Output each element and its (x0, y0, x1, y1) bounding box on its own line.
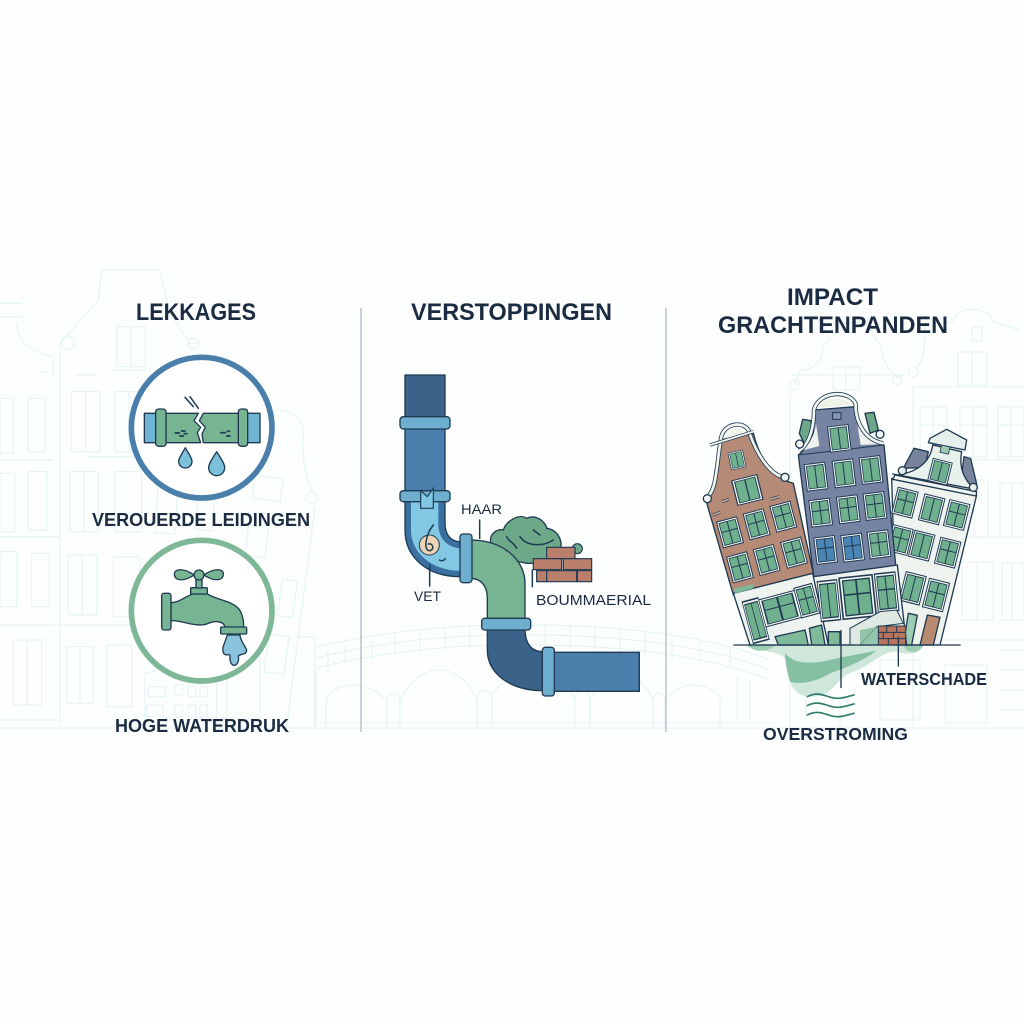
clogged elbow (405, 500, 460, 577)
icon: water waves (807, 694, 854, 717)
illustration: leaning canal houses with flood (703, 394, 977, 717)
label: hoge waterdruk: HOGE WATERDRUK (115, 715, 290, 736)
damaged bricks (878, 626, 906, 645)
heading: impact grachtenpanden: IMPACT (787, 284, 878, 311)
bricks (533, 544, 592, 582)
heading: impact grachtenpanden (718, 284, 948, 339)
blue house (796, 394, 907, 645)
label: waterschade: WATERSCHADE (861, 669, 987, 689)
right house (887, 429, 977, 645)
bush (490, 517, 561, 563)
heading: lekkages: LEKKAGES (136, 299, 256, 326)
column dividers (361, 308, 666, 732)
background: faint bridge (0, 625, 1024, 728)
green elbow (470, 540, 525, 620)
heading: impact grachtenpanden: GRACHTENPANDEN (718, 312, 948, 339)
label: overstroming: OVERSTROMING (763, 724, 908, 744)
icon: dripping tap in green circle (131, 540, 272, 681)
ground line (733, 643, 961, 647)
leader lines (430, 520, 480, 586)
heading: verstoppingen: VERSTOPPINGEN (411, 299, 612, 326)
leader lines (841, 630, 898, 688)
icon: cracked pipe in blue circle (131, 357, 272, 498)
diagram: blocked drain pipe (400, 375, 639, 696)
label: verouerde leidingen: VEROUERDE LEIDINGEN (92, 509, 310, 530)
label: boummaerial: BOUMMAERIAL (536, 592, 651, 609)
background: faint right canal houses (790, 309, 1024, 728)
brown house (703, 425, 830, 645)
lower elbow and outlet (487, 628, 543, 691)
label: haar: HAAR (461, 501, 502, 517)
label: vet: VET (414, 588, 441, 604)
top pipe (405, 375, 445, 418)
flood water (745, 645, 923, 697)
background: faint left canal house (0, 270, 318, 727)
